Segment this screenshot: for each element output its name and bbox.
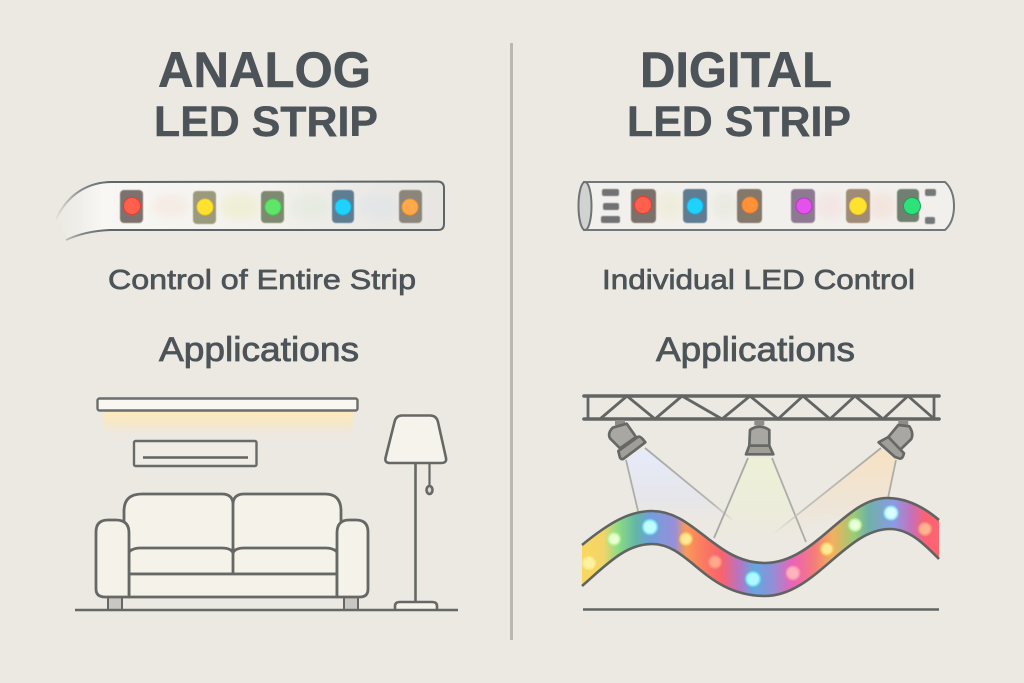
led: green	[261, 191, 284, 223]
sofa backrest	[124, 494, 341, 550]
heading: analog led strip: ANALOG	[158, 42, 371, 98]
illustration: stage lighting	[582, 396, 939, 610]
illustration: living room	[75, 398, 458, 610]
led: blue	[332, 190, 354, 223]
led: red	[631, 189, 656, 223]
center divider	[510, 43, 513, 640]
sofa feet	[108, 597, 358, 610]
panel: digital	[578, 42, 954, 610]
ceiling cove strip	[98, 398, 358, 410]
heading: digital led strip	[627, 42, 851, 146]
led: blue	[683, 189, 707, 223]
spotlight left	[609, 420, 645, 459]
wall air conditioner	[134, 441, 256, 466]
rgb wave strip	[582, 498, 939, 596]
floor line	[583, 608, 939, 611]
sofa cushions	[129, 548, 337, 574]
sofa arms	[96, 520, 129, 597]
led: magenta	[791, 189, 815, 223]
spotlight center	[746, 420, 773, 454]
led: orange	[399, 190, 422, 223]
lighting truss	[584, 396, 939, 419]
light beams	[626, 448, 897, 545]
sofa base	[129, 574, 337, 597]
heading: digital led strip: LED STRIP	[627, 98, 851, 146]
analog strip	[56, 182, 444, 240]
heading: applications: Applications	[656, 331, 855, 369]
spotlight right	[879, 420, 912, 459]
connector pads right	[925, 189, 936, 224]
heading: applications: Applications	[159, 331, 359, 369]
led: green	[897, 189, 920, 222]
led: orange	[737, 189, 762, 223]
heading: analog led strip: LED STRIP	[154, 98, 378, 146]
cove light glow	[104, 410, 353, 438]
digital strip	[578, 182, 954, 230]
heading: digital led strip: DIGITAL	[640, 42, 832, 98]
led: yellow	[846, 189, 870, 223]
connector pads left	[601, 189, 620, 223]
rgb leds	[583, 506, 931, 586]
colour glows	[152, 194, 398, 220]
sofa	[96, 494, 368, 610]
panel: analog	[56, 42, 458, 610]
caption: individual led control: Individual LED Control	[602, 264, 915, 295]
caption: control of entire strip: Control of Entire Strip	[108, 264, 416, 295]
led: yellow	[193, 191, 216, 224]
colour glows	[656, 192, 896, 220]
floor lamp	[385, 416, 446, 609]
floor line	[75, 609, 458, 611]
led: red	[120, 190, 143, 223]
heading: analog led strip	[154, 42, 378, 146]
